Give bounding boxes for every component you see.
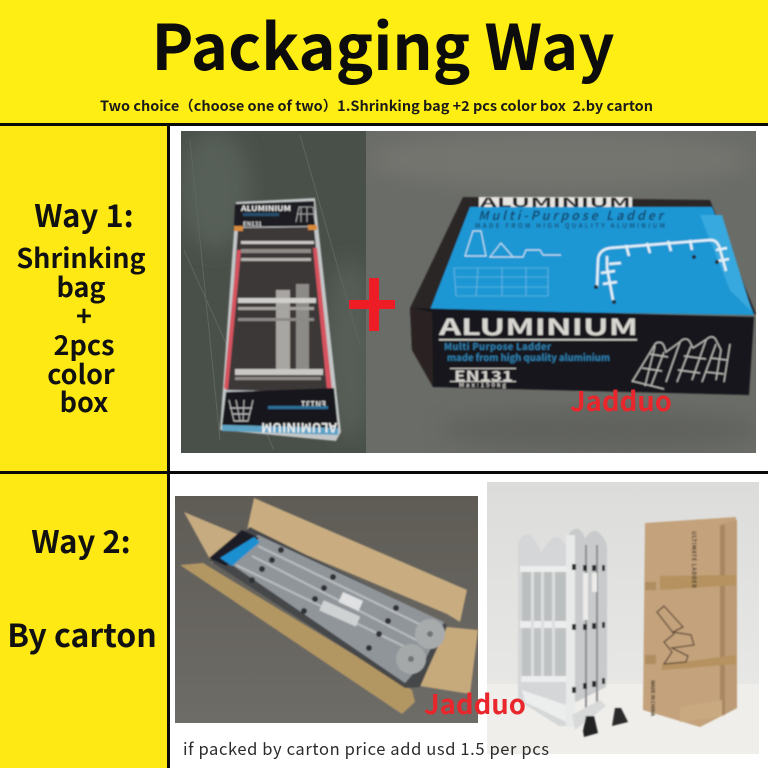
way 1 description: Shrinking <box>16 237 146 276</box>
ladder bundle <box>209 527 447 688</box>
bottom box sleeve <box>222 388 338 428</box>
carton lettering: ULTIMATE LADDER <box>690 531 698 588</box>
title: Packaging Way <box>152 0 614 89</box>
colour box: Multi-Purpose Ladder <box>478 205 666 224</box>
watermark: Jadduo: Jadduo <box>570 380 672 419</box>
colour box: ALUMINIUM <box>478 192 631 211</box>
photo: ladder beside carton box: MADE IN CHINA <box>649 680 656 717</box>
rubber feet <box>583 716 598 737</box>
shrink-wrapped ladder: EN131 <box>301 398 326 409</box>
photo: ladder beside carton box <box>487 482 759 754</box>
way 2 description: By carton <box>7 611 157 657</box>
watermark: Jadduo: Jadduo <box>424 683 526 722</box>
photo: ladder in open carton <box>175 496 478 723</box>
cardboard carton <box>643 517 737 727</box>
way 1 description: 2pcs <box>54 324 114 363</box>
colour box: made from high quality aluminium <box>447 350 610 364</box>
subtitle: Two choice（choose one of two）1.Shrinking bag +2 pcs color box 2.by carton <box>100 96 653 116</box>
colour box: Multi Purpose Ladder <box>444 339 552 353</box>
way 2 heading: Way 2: <box>31 517 131 562</box>
top box sleeve <box>234 201 315 227</box>
colour box: Max:150kg <box>459 380 506 389</box>
folded aluminium ladder <box>518 529 628 737</box>
shrink-wrapped ladder: ALUMINIUM <box>261 419 338 438</box>
photo: shrink-wrapped ladder and colour box <box>180 130 760 453</box>
panel: way 1 label <box>0 126 167 471</box>
panel: way 2 label <box>0 474 167 768</box>
shrink-wrapped ladder: EN131 <box>243 219 262 228</box>
colour box: ALUMINIUM <box>437 310 638 342</box>
shrink-wrapped ladder: ALUMINIUM <box>240 204 291 214</box>
way 1 description: color <box>47 353 115 392</box>
header band <box>0 0 768 123</box>
way 1 heading: Way 1: <box>34 191 134 236</box>
shrink-wrapped ladder <box>220 198 341 441</box>
colour box: EN131 <box>454 366 513 386</box>
colour box: MADE FROM HIGH QUALITY ALUMINIUM <box>475 220 665 230</box>
carton flaps <box>247 498 467 622</box>
way 1 description <box>16 237 146 420</box>
way 1 description: + <box>76 295 92 334</box>
way 1 description: box <box>60 381 108 420</box>
colour box <box>410 192 756 395</box>
way 1 description: bag <box>56 266 106 305</box>
carton price note: if packed by carton price add usd 1.5 per pcs <box>183 736 549 760</box>
icon: red plus sign <box>349 278 395 331</box>
